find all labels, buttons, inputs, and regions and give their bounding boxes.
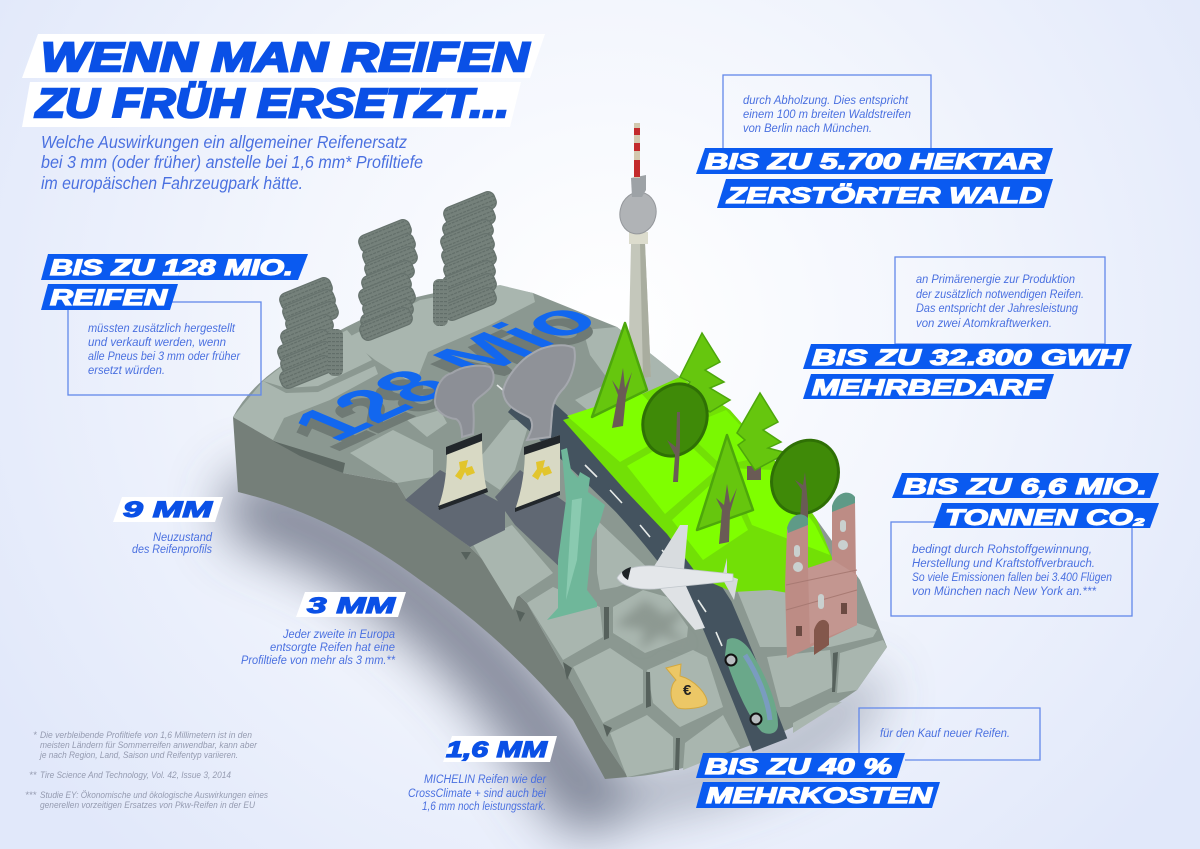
footnotes [25,730,268,811]
label: 1,6 mm: 1,6 mm noch leistungsstark. [422,801,546,813]
triangle tree 1 [592,323,647,428]
cooling tower 2 with smoke [503,345,575,512]
callout: 6,6 Mio. Tonnen CO2: von München nach New York an.*** [912,586,1097,598]
dark plates under the cooling towers [405,470,590,572]
callout: 6,6 Mio. Tonnen CO2: So viele Emissionen fallen bei 3.400 Flügen [912,572,1112,584]
label: 3 mm: Jeder zweite in Europa [282,629,395,641]
3D text: 128 Mio: 128 Mio [271,294,620,450]
car [725,638,778,734]
trees [592,323,851,544]
footnotes: Die verbleibende Profiltiefe von 1,6 Millimetern ist in den [40,730,252,741]
3D text: 128 Mio: 128 Mio [271,303,620,459]
callout: 32.800 GWh: BIS ZU 32.800 GWH [812,345,1124,370]
callout: 128 Mio. Reifen: und verkauft werden, wenn [88,337,226,349]
intro text: Welche Auswirkungen ein allgemeiner Reifenersatz [41,132,407,152]
callout: 128 Mio. Reifen: alle Pneus bei 3 mm oder früher [88,351,241,363]
callout: 6,6 Mio. Tonnen CO2: Herstellung und Kraftstoffverbrauch. [912,558,1095,570]
tyre side wall [233,417,628,779]
TV tower [616,123,660,380]
label: 1,6 mm: 1,6 MM [446,737,548,762]
callout: 32.800 GWh: MEHRBEDARF [812,375,1044,400]
label: 3 mm: 3 MM [307,593,396,618]
title: WENN MAN REIFEN [41,34,531,80]
intro text [41,132,423,193]
tyre top surface [233,287,887,777]
tread blocks [233,285,887,777]
label: 3 mm: entsorgte Reifen hat eine [270,642,395,654]
plane shadow on tread [615,600,690,650]
illustration: tyre tread segment [233,285,887,779]
callout: 40 % Mehrkosten: BIS ZU 40 % [705,754,892,779]
money bag [666,664,707,709]
callout: 40 % Mehrkosten: MEHRKOSTEN [706,783,934,808]
callout: 32.800 GWh: der zusätzlich notwendigen Reifen. [916,289,1084,301]
round tree 1 [631,373,719,482]
statue of liberty [547,448,605,620]
callout: 32.800 GWh: Das entspricht der Jahresleistung [916,303,1079,315]
callout: 128 Mio. Reifen [41,254,308,395]
dark grooves between blocks [461,552,838,770]
title: ZU FRÜH ERSETZT... [35,80,509,126]
forest ground [563,377,833,600]
label: 9 mm: 9 MM [123,497,213,522]
callout: 40 % Mehrkosten: für den Kauf neuer Reifen. [880,728,1010,740]
label: 3 mm [241,592,406,667]
label: 9 mm: des Reifenprofils [132,544,212,556]
footnotes: meisten Ländern für Sommerreifen anwendbar, kann aber [40,740,258,751]
label: 1,6 mm: CrossClimate + sind auch bei [408,788,546,800]
callout: 5.700 Hektar: ZERSTÖRTER WALD [726,183,1042,208]
callout: 128 Mio. Reifen: ersetzt würden. [88,365,165,377]
cooling tower 1 with smoke [435,366,494,510]
label: 1,6 mm: MICHELIN Reifen wie der [424,774,547,786]
label: 9 mm: Neuzustand [153,532,213,544]
footnotes: generellen vorzeitigen Ersatzes von Pkw-Reifen in der EU [40,800,255,811]
title [22,34,545,127]
shadow under the tyre segment [262,510,860,800]
callout: 32.800 GWh: an Primärenergie zur Produktion [916,274,1075,286]
footnotes: *** [25,790,36,801]
callout: 32.800 GWh [803,257,1132,400]
callout: 128 Mio. Reifen: BIS ZU 128 MIO. [50,255,293,280]
intro text: im europäischen Fahrzeugpark hätte. [41,173,303,193]
label: 9 mm [113,497,223,556]
callout: 40 % Mehrkosten [696,708,1040,808]
fir tree 1 [680,333,730,412]
callout: 6,6 Mio. Tonnen CO2: BIS ZU 6,6 MIO. [903,474,1147,499]
label: 1,6 mm [408,736,557,813]
callout: 5.700 Hektar [696,75,1053,208]
church [785,493,857,658]
callout: 5.700 Hektar: einem 100 m breiten Waldstreifen [743,109,911,121]
callout: 5.700 Hektar: von Berlin nach München. [743,123,872,135]
callout: 5.700 Hektar: BIS ZU 5.700 HEKTAR [705,149,1042,174]
round tree 2 [759,428,851,526]
road [497,385,770,745]
footnotes: ** [29,770,37,781]
footnotes: * [33,730,37,741]
callout: 128 Mio. Reifen: REIFEN [50,285,169,310]
fir tree 2 [737,393,787,480]
intro text: bei 3 mm (oder früher) anstelle bei 1,6 mm* Profiltiefe [41,152,423,172]
money bag: € [683,682,692,699]
callout: 6,6 Mio. Tonnen CO2 [891,473,1159,616]
callout: 128 Mio. Reifen: müssten zusätzlich hergestellt [88,323,236,335]
footnotes: je nach Region, Land, Saison und Reifentyp variieren. [38,750,238,761]
callout: 6,6 Mio. Tonnen CO2: TONNEN CO₂ [945,505,1145,530]
callout: 32.800 GWh: von zwei Atomkraftwerken. [916,318,1052,330]
callout: 5.700 Hektar: durch Abholzung. Dies entspricht [743,95,909,107]
label: 3 mm: Profiltiefe von mehr als 3 mm.** [241,655,395,667]
footnotes: Studie EY: Ökonomische und ökologische Auswirkungen eines [40,790,268,801]
airplane [617,525,738,630]
triangle tree 2 [697,435,753,544]
footnotes: Tire Science And Technology, Vol. 42, Issue 3, 2014 [40,770,231,781]
callout: 6,6 Mio. Tonnen CO2: bedingt durch Rohstoffgewinnung, [912,544,1092,556]
stacks of tyres [276,190,498,390]
